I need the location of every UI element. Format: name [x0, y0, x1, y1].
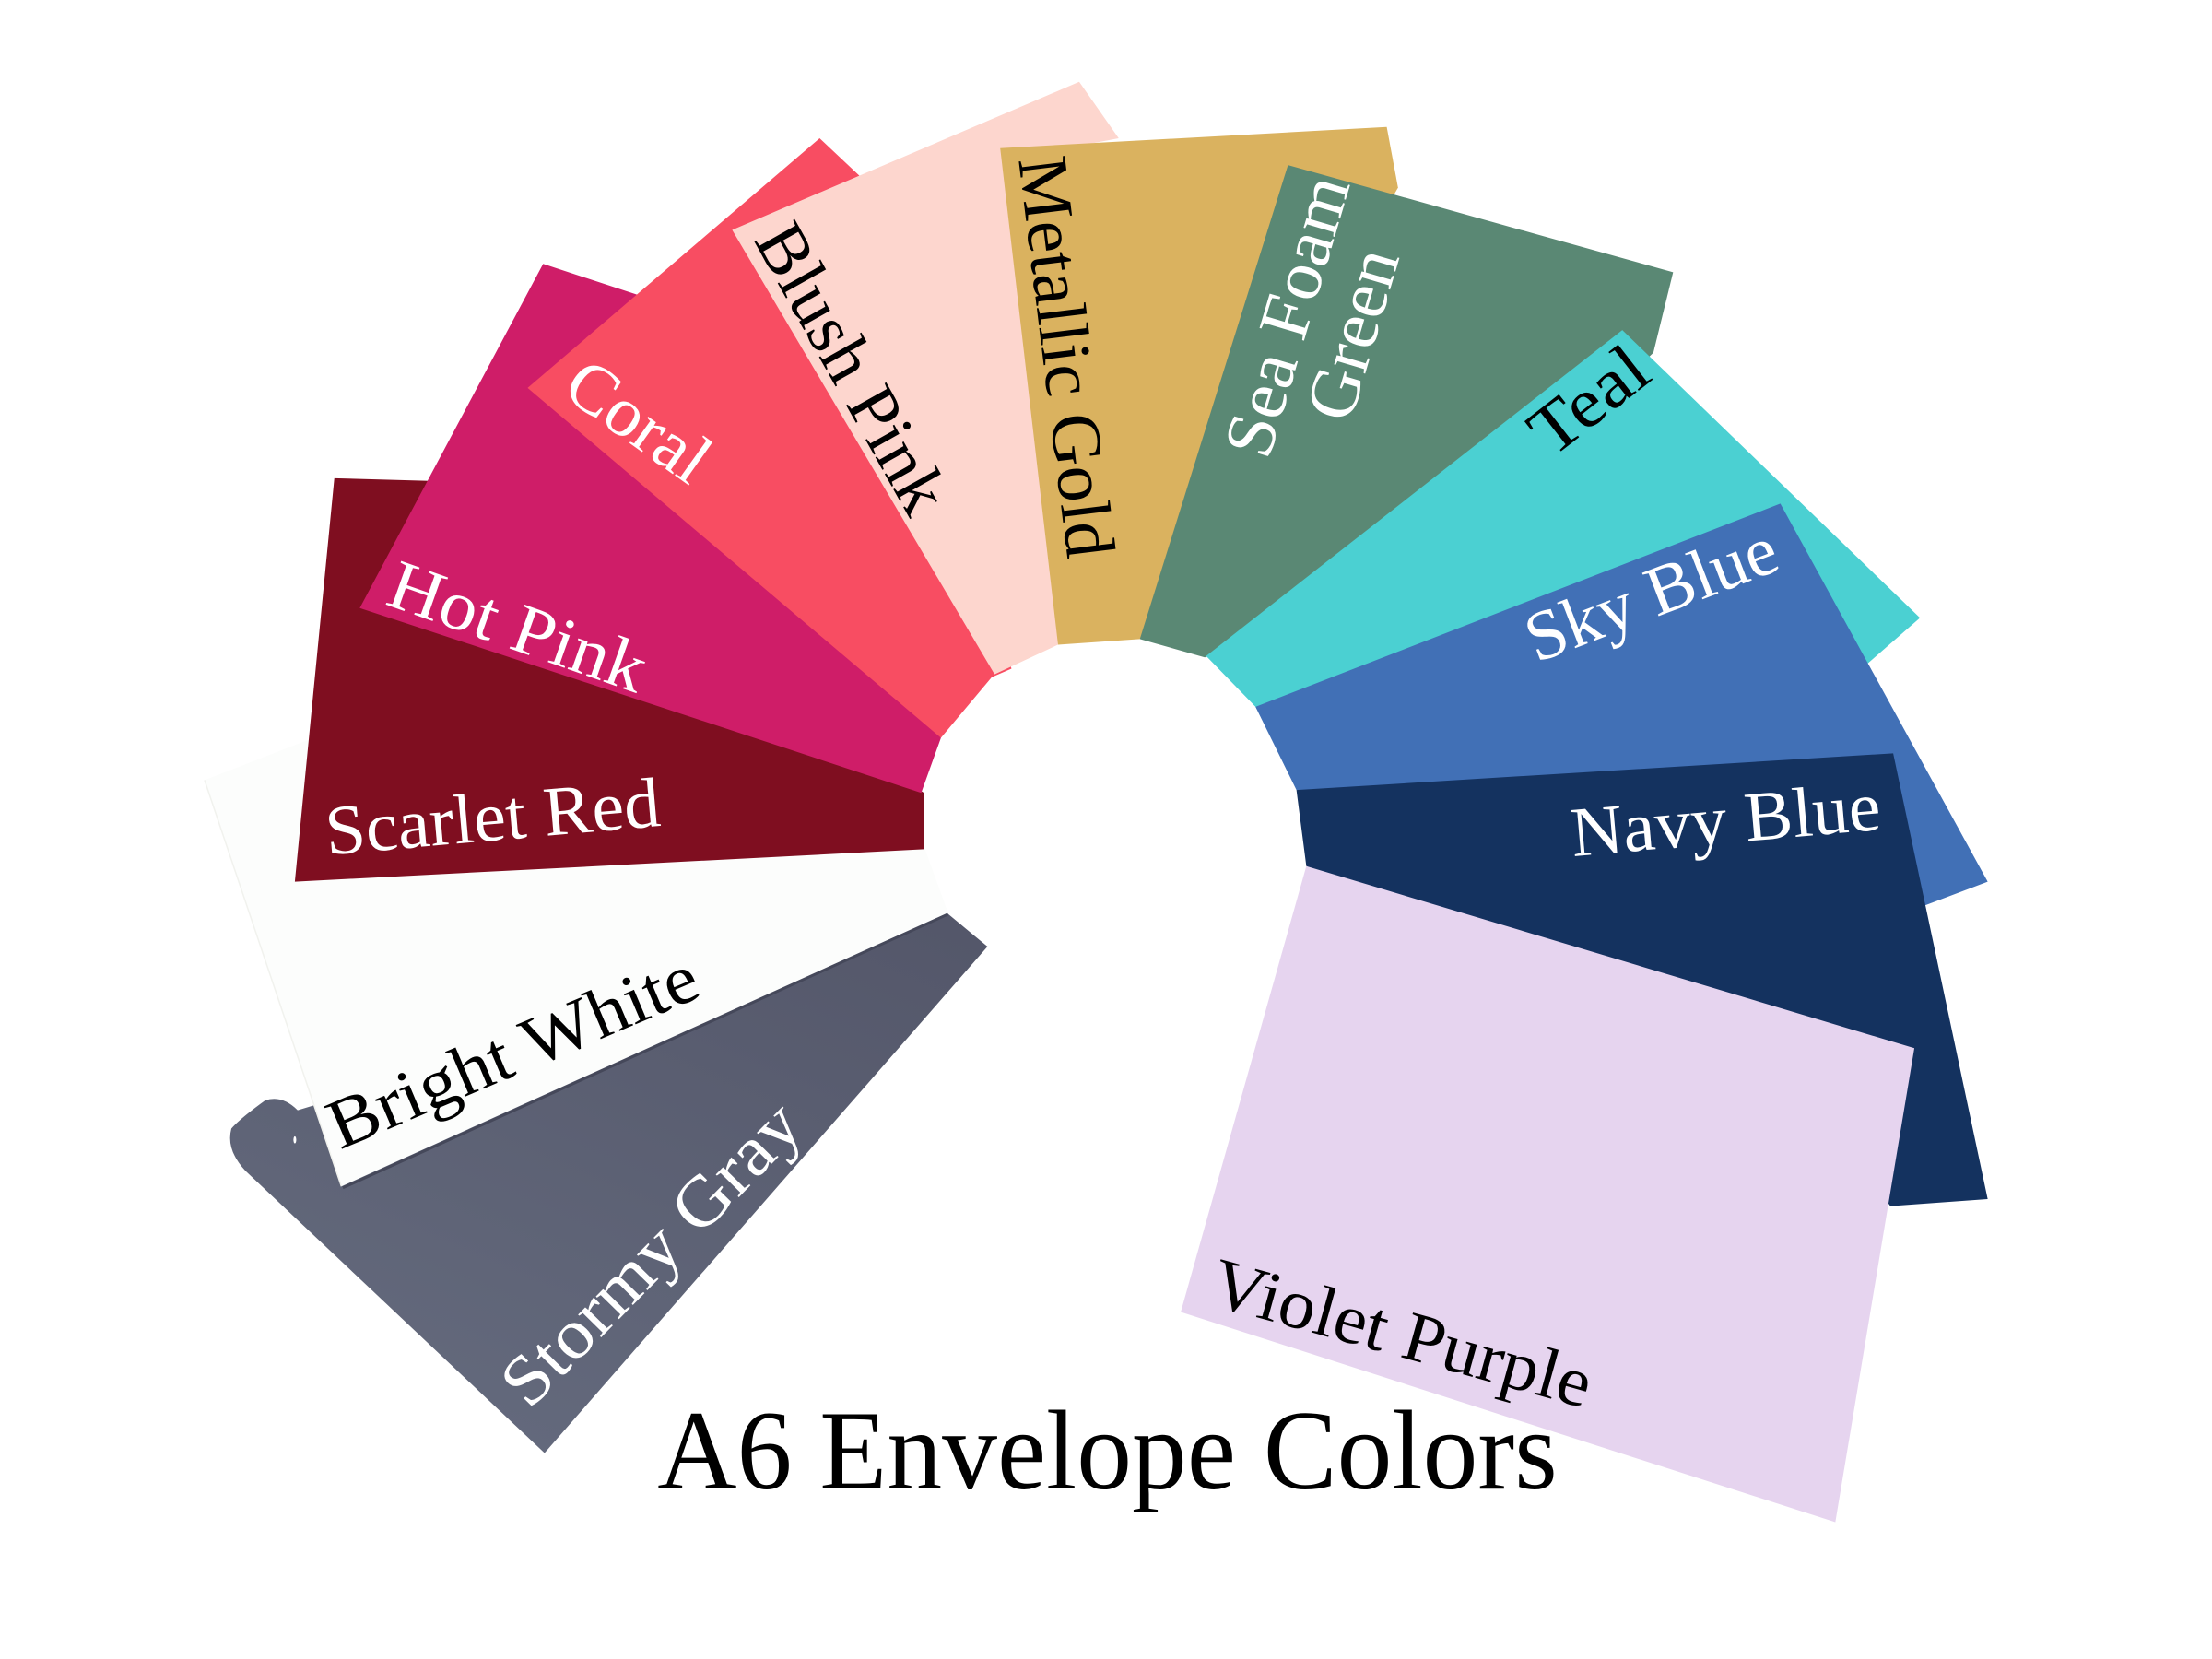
envelope: Blush Pink — [732, 82, 1119, 675]
envelope: Teal — [1206, 329, 1920, 734]
envelope: Violet Purple: Violet Purple — [1204, 1243, 1601, 1423]
envelope: Hot Pink — [359, 264, 941, 793]
envelope: Coral — [527, 138, 1011, 738]
envelope: Sky Blue: Sky Blue — [1513, 510, 1788, 677]
envelope: Sea Foam Green — [1140, 165, 1673, 657]
envelope: Coral: Coral — [551, 343, 726, 499]
envelope: Sky Blue — [1255, 503, 1988, 931]
envelope: Metallic Gold: Metallic Gold — [1003, 152, 1130, 562]
title: A6 Envelope Colors — [657, 1389, 1558, 1513]
envelope: Sea Foam Green: Sea Foam — [1208, 166, 1365, 465]
envelope: Scarlet Red — [295, 478, 924, 882]
envelope: Bright White: Bright White — [315, 937, 710, 1164]
envelope: Metallic Gold — [1000, 127, 1398, 644]
envelope: Hot Pink: Hot Pink — [379, 545, 658, 708]
envelope: Navy Blue — [1297, 753, 1988, 1206]
envelope: Sea Foam Green: Green — [1290, 239, 1415, 429]
envelope: Scarlet Red: Scarlet Red — [322, 763, 663, 870]
envelope: Violet Purple — [1181, 866, 1914, 1523]
envelope: Stormy Gray: Stormy Gray — [484, 1085, 817, 1422]
envelope: Teal: Teal — [1513, 329, 1664, 471]
envelope: Blush Pink: Blush Pink — [740, 209, 965, 527]
envelope: Bright White — [205, 734, 948, 1188]
envelope: Navy Blue: Navy Blue — [1568, 767, 1884, 872]
envelope: Stormy Gray — [230, 912, 987, 1453]
